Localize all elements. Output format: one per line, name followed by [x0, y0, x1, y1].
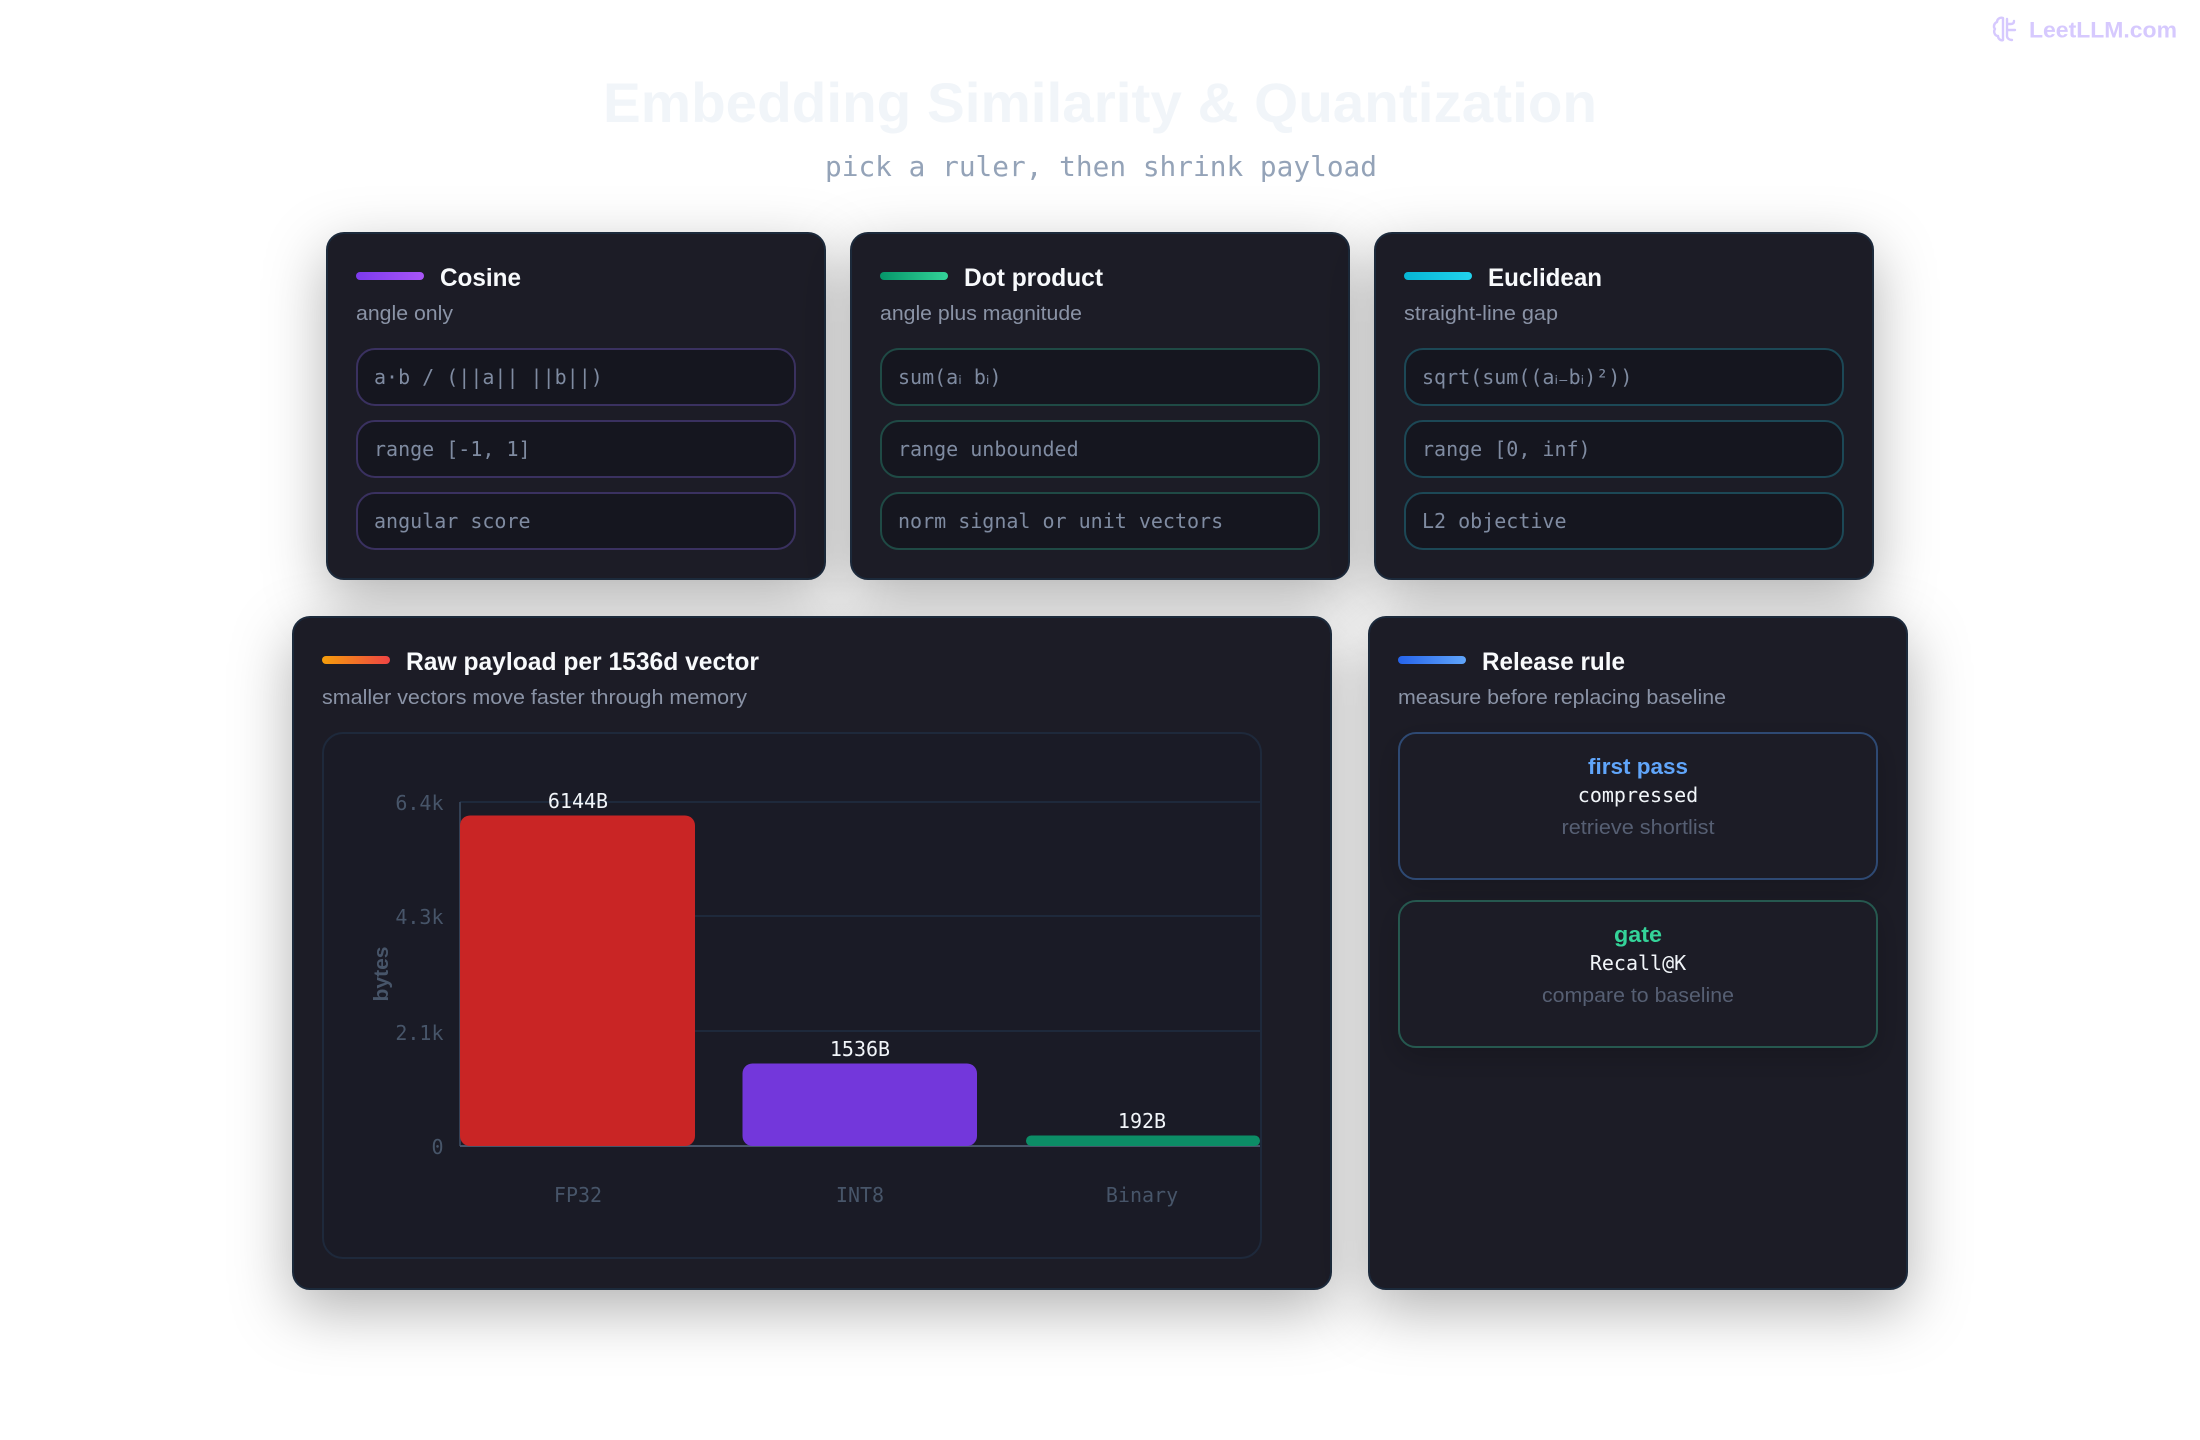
y axis ticks: 0 [431, 1135, 444, 1159]
pill: range: range [0, inf) [1422, 437, 1591, 461]
y axis ticks: 6.4k [395, 791, 444, 815]
card: gate: compare to baseline [1542, 985, 1734, 1007]
watermark text: LeetLLM.com [2029, 18, 2177, 42]
pill: formula: sqrt(sum((aᵢ₋bᵢ)²)) [1422, 365, 1632, 389]
pill: formula: a·b / (||a|| ||b||) [374, 365, 603, 389]
panel: euclidean [1375, 233, 1873, 579]
card: first pass: retrieve shortlist [1562, 817, 1715, 839]
pill: norm signal: norm signal or unit vectors [898, 509, 1223, 533]
heading: dot product: Dot product [964, 264, 1104, 292]
pill: L2 objective [1405, 493, 1843, 549]
subheading: cosine: angle only [356, 303, 453, 325]
accent bar: euclidean [1404, 272, 1472, 280]
panel: release rule [1369, 617, 1907, 1289]
y axis label: bytes [371, 946, 393, 1002]
card: gate: Recall@K [1590, 951, 1686, 975]
y axis ticks [395, 791, 444, 1159]
pill: norm signal [881, 493, 1319, 549]
title: Embedding Similarity & Quantization [603, 71, 1597, 134]
card: first pass: first pass [1588, 754, 1688, 779]
bar: Binary: 192B [1118, 1109, 1166, 1133]
pill: formula [881, 349, 1319, 405]
pill: range [1405, 421, 1843, 477]
bar: FP32: FP32 [554, 1183, 602, 1207]
heading: euclidean: Euclidean [1488, 264, 1602, 292]
icon: brain [1994, 18, 2015, 40]
subheading: raw payload: smaller vectors move faster through memory [322, 687, 747, 709]
bar: Binary [1026, 1109, 1260, 1207]
pill: range: range unbounded [898, 437, 1079, 461]
pill: range [881, 421, 1319, 477]
bar: Binary: Binary [1106, 1183, 1178, 1207]
heading: raw payload: Raw payload per 1536d vector [406, 648, 759, 676]
pill: range [357, 421, 795, 477]
card: gate [1399, 901, 1877, 1047]
bar chart [323, 733, 1261, 1258]
watermark: LeetLLM.com [1994, 18, 2177, 42]
accent bar: release rule [1398, 656, 1466, 664]
subtitle: pick a ruler, then shrink payload [825, 150, 1377, 183]
pill: angular score [357, 493, 795, 549]
subheading: euclidean: straight-line gap [1404, 303, 1558, 325]
y axis ticks: 4.3k [395, 905, 444, 929]
panel: raw payload [293, 617, 1331, 1289]
y axis ticks: 2.1k [395, 1021, 444, 1045]
card: first pass: compressed [1578, 783, 1698, 807]
card: first pass [1399, 733, 1877, 879]
bar: INT8: INT8 [836, 1183, 884, 1207]
bar: FP32: 6144B [548, 789, 608, 813]
pill: formula [1405, 349, 1843, 405]
pill: angular score: angular score [374, 509, 531, 533]
subheading: release rule: measure before replacing baseline [1398, 687, 1726, 709]
card: gate: gate [1614, 922, 1662, 947]
bar: FP32 [460, 789, 695, 1207]
accent bar: dot product [880, 272, 948, 280]
bar: INT8 [742, 1037, 977, 1207]
heading: cosine: Cosine [440, 264, 521, 292]
heading: release rule: Release rule [1482, 648, 1625, 676]
pill: formula [357, 349, 795, 405]
subheading: dot product: angle plus magnitude [880, 303, 1082, 325]
panel: cosine [327, 233, 825, 579]
pill: L2 objective: L2 objective [1422, 509, 1566, 533]
accent bar: cosine [356, 272, 424, 280]
accent bar: raw payload [322, 656, 390, 664]
pill: range: range [-1, 1] [374, 437, 531, 461]
panel: dot product [851, 233, 1349, 579]
bar: INT8: 1536B [830, 1037, 890, 1061]
pill: formula: sum(aᵢ bᵢ) [898, 365, 1002, 389]
